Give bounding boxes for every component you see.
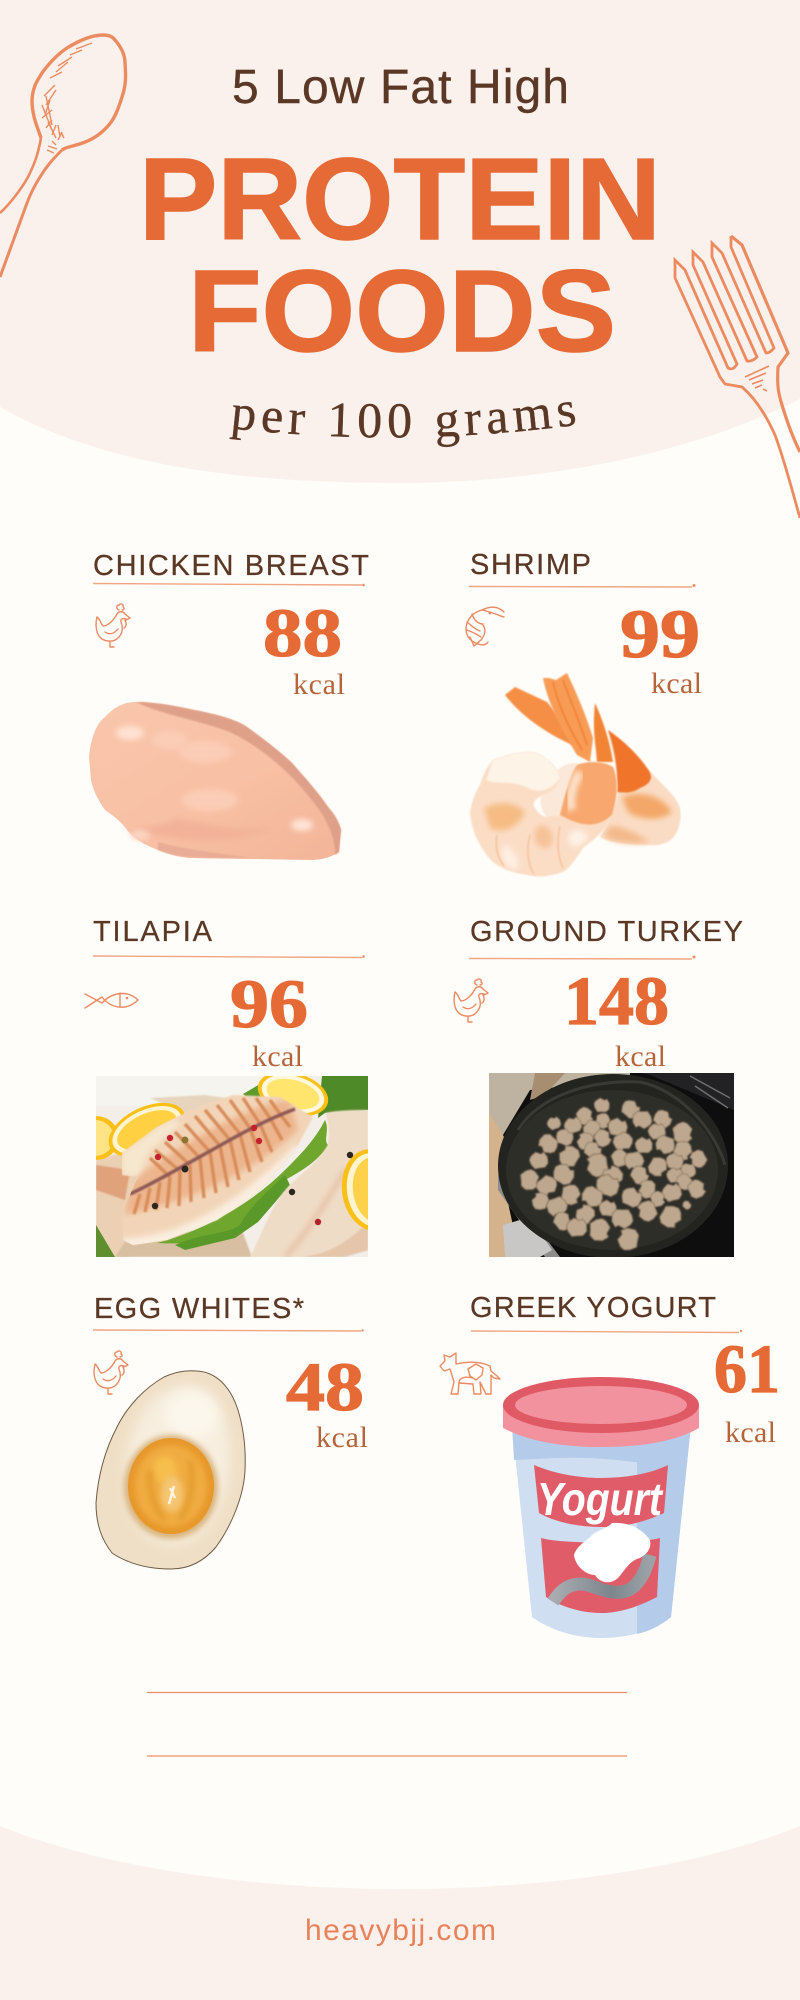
underline (469, 584, 696, 587)
image: egg (96, 1371, 245, 1569)
title: PROTEIN FOODS: FOODS (188, 246, 616, 376)
heading: 5 Low Fat High: 5 Low Fat High (232, 61, 569, 114)
panel: shrimp (466, 549, 702, 877)
calorie value: 99 (620, 596, 700, 672)
underline (93, 584, 365, 586)
heading: egg whites: EGG WHITES* (94, 1293, 304, 1325)
panel: greek yogurt (440, 1292, 780, 1638)
calorie value: 148 (564, 963, 669, 1039)
panel: tilapia (84, 920, 368, 1257)
subheading: per 100 grams: per 100 grams (229, 402, 576, 448)
icon: fish (85, 993, 138, 1008)
heading: shrimp: SHRIMP (470, 549, 591, 581)
image: yogurt cup: Yogurt (537, 1473, 663, 1525)
heading: ground turkey: GROUND TURKEY (470, 916, 743, 948)
panel: chicken breast (89, 550, 369, 860)
unit: kcal (316, 1421, 368, 1454)
image: tilapia (96, 1076, 368, 1257)
unit: kcal (651, 667, 702, 700)
underline (471, 1330, 742, 1332)
image: yogurt cup (503, 1377, 699, 1638)
icon: chicken (96, 604, 130, 647)
underline (93, 955, 365, 958)
calorie value: 61 (714, 1331, 780, 1407)
unit: kcal (252, 1040, 303, 1073)
calorie value: 88 (263, 595, 342, 671)
title: PROTEIN FOODS: PROTEIN (139, 134, 661, 264)
underline (93, 1329, 364, 1332)
panel: ground turkey (454, 916, 743, 1258)
image: ground turkey (489, 1073, 734, 1258)
calorie value: 48 (286, 1349, 364, 1425)
underline (469, 956, 696, 959)
header background curve (0, 0, 800, 483)
icon: shrimp (466, 607, 504, 646)
icon: cow (440, 1353, 500, 1394)
divider lines (147, 1692, 627, 1756)
heading: tilapia: TILAPIA (93, 916, 213, 948)
heading: greek yogurt: GREEK YOGURT (470, 1292, 716, 1324)
image: chicken breast (89, 702, 341, 860)
footer background curve (0, 1826, 800, 2000)
title: PROTEIN FOODS (139, 134, 661, 376)
unit: kcal (725, 1416, 776, 1449)
panel: egg whites (93, 1293, 368, 1569)
footer: website: heavybjj.com (305, 1914, 496, 1947)
icon: spoon illustration (0, 35, 126, 277)
heading: chicken breast: CHICKEN BREAST (93, 550, 369, 582)
image: shrimp (470, 673, 681, 877)
unit: kcal (615, 1040, 666, 1073)
unit: kcal (293, 668, 345, 701)
icon: chicken (94, 1351, 128, 1394)
icon: fork illustration (675, 236, 800, 518)
icon: chicken (454, 979, 488, 1022)
calorie value: 96 (230, 966, 308, 1042)
